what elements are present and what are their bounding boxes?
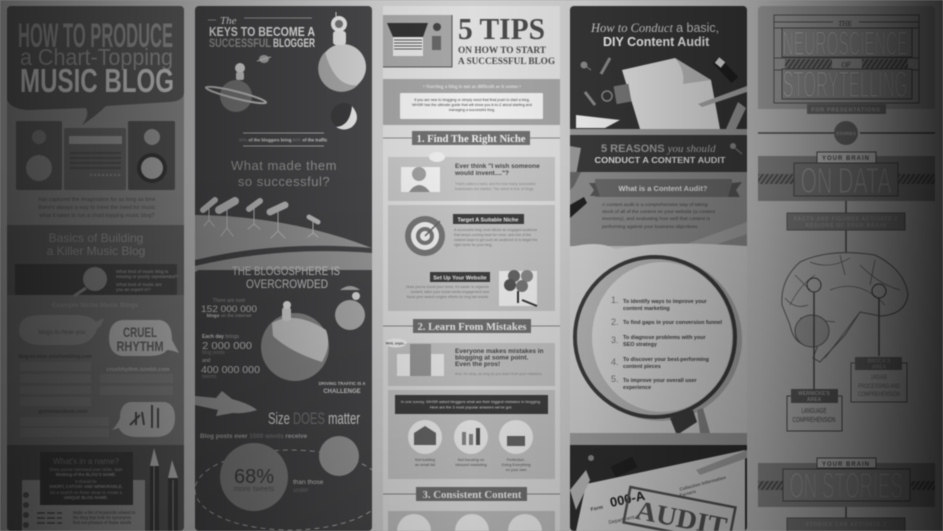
illustration: rocket [195,391,257,416]
blog url and description: greenlandbob.com [38,409,88,415]
card: survey [388,390,555,479]
card: consistent content [388,511,555,531]
callout: broca's area: AREA [872,364,886,370]
illustration: ringed planet with astronaut [205,63,267,112]
callout: broca's area: BROCA'S [868,358,891,364]
header background and title: DIY Content Audit [603,35,710,49]
label: stories can activate: STORIES CAN ACTIVATE 7 [805,522,887,528]
heading: 2. learn from mistakes [383,319,560,333]
blog statistics: 2 000 000 [202,341,252,352]
blog statistics: blogs on the internet [207,313,252,319]
than those under [292,479,324,492]
speech bubble: cruel rhythm [109,320,179,356]
list of five reasons: content marketing [623,306,670,312]
label: example niche music blogs: Example Niche Music Blogs [52,302,139,309]
planet: small [319,436,359,476]
speech bubble: cruel rhythm: CRUEL [123,324,157,340]
stereo speakers and radio [16,121,175,190]
list of five reasons: 3. [611,335,619,345]
heading: 5 reasons [570,135,747,172]
heading: 1. find the right niche [383,131,560,145]
small planet [257,55,271,63]
card: survey: In one survey, WHSR asked bloggers what are their biggest mistakes in blogging. [401,399,541,404]
what's in a name box [40,452,133,505]
open book [570,244,747,433]
blog description lists [19,354,170,372]
title: BLOGGER [273,36,315,50]
section header: your brain on stories: YOUR BRAIN [822,462,870,468]
blog statistics: blog posts [202,350,225,356]
card: ever think: businesses are started. The same is true of blogs. [455,187,534,191]
title frame [774,15,919,103]
card: everyone makes mistakes: Even the pros! [455,361,500,368]
audit form illustration: Department of [608,513,641,526]
blog statistics [201,298,260,380]
title: KEYS TO BECOME A [209,24,315,39]
title: 5 tips: 5 TIPS [458,11,545,46]
blog statistics: There are over [213,298,246,304]
card: everyone makes mistakes: Everyone makes mistakes in [455,348,544,355]
blog url and description [39,410,88,414]
blog posts note: Blog posts over 1500 words receive [200,433,308,440]
callout: broca's area: COMPREHENSION [858,391,900,398]
card: target and website: right niche for your blog. [454,243,493,247]
callout: wernicke's area [787,389,842,431]
illustration: crowded planet [261,286,365,381]
than those under: under [293,488,308,494]
what's in a name box: UNIQUE BLOG NAME. [64,495,108,500]
section header: your brain on stories [758,458,935,507]
card: everyone makes mistakes: And, it's okay, as long as you learn from your mistakes. [455,372,543,376]
card: target and website: A successful blog must attract an engaged audience [454,228,537,232]
card: everyone makes mistakes: blogging at some point. [455,354,528,362]
what's in a name box: Once you've narrowed your niche, start [50,467,123,472]
definition text: inventory), and evaluating how well that content is [602,216,710,222]
dark question box with magnifier: missing or poorly represented? [116,274,178,279]
magnifying glass [575,257,742,433]
definition text: stock of all of the content on your website (a content [602,209,715,215]
heading: 3. consistent content: 3. Consistent Content [422,490,522,501]
card: ever think: That's called a need, and it's how many successful [455,182,536,186]
what's in a name box: It should be [75,479,97,484]
panel: neuroscience of storytelling [758,6,935,531]
speech bubble: first blog [19,315,104,345]
intro text [38,197,156,219]
card: survey: inbound marketing [455,463,487,467]
pencils [150,448,178,531]
card: target and website: focus your search engine efforts for long tail results. [407,295,489,299]
heading: blogosphere overcrowded: OVERCROWDED [246,277,328,291]
card: target and website [388,205,555,311]
title: 5 tips: ON HOW TO START [458,45,546,55]
heading: 1. find the right niche: 1. Find The Right Niche [416,134,526,145]
big planet: 68% more tweets [220,443,288,511]
card: ever think: Ever think "I wish someone [455,163,540,170]
speech bubble: first blog: blogs-to-hear-you [38,330,86,336]
orbit path [195,450,385,530]
list of five reasons: 4. [611,357,619,367]
panel: keys to become a successful blogger [195,6,385,531]
speech bubble: cruel rhythm: RHYTHM [116,338,164,354]
callout: wernicke's area: LANGUAGE [802,408,827,415]
blog statistics: Each day brings [202,334,239,340]
pencil [678,222,747,252]
ribbon: what is a content audit [589,179,742,197]
list of five reasons [611,295,723,391]
card: target and website: Target A Suitable Niche [458,218,518,224]
panel: music blog infographic [7,6,184,531]
callout: driving traffic [319,381,365,395]
heading: 2. learn from mistakes: 2. Learn From Mistakes [418,322,527,333]
what's in a name box: thinking of the BLOG'S NAME. [56,472,116,477]
callout: broca's area [851,357,907,402]
keyword list: find out phrases of those words [73,520,131,525]
heading: basics of building: a Killer Music Blog [47,244,145,258]
title [208,15,315,50]
label: stories can activate [787,507,905,531]
seal divider [758,121,935,145]
intro text: has captured the imagination for as long as time [38,197,156,203]
title speech bubble: a Chart-Topping [20,44,173,70]
list of five reasons: To diagnose problems with your [623,335,706,341]
heading: 3. consistent content [383,487,560,501]
usb and pen props [570,146,747,246]
heading: size does matter: Size DOES matter [268,409,360,428]
hill with telescopes [195,200,372,272]
label: facts and figures: REGIONS OF YOUR BRAIN [805,223,887,229]
header laptop illustration [383,15,452,67]
list of five reasons: 1. [611,295,619,305]
intro band: If you are new to blogging or simply need that final push to start a blog, [414,98,530,102]
keyword list: Make a list of keywords related to [73,510,136,515]
title speech bubble [7,6,184,125]
heading: 5 reasons: CONDUCT A CONTENT AUDIT [594,155,726,165]
ribbon: what is a content audit: What is a Content Audit? [619,184,708,193]
label: facts and figures [787,201,905,252]
statistic: 20% of bloggers [239,133,328,146]
illustration: paper, clip and pencil [576,58,747,129]
for presentations ribbon [807,104,886,114]
title text [782,20,908,105]
card: target and website: Set Up Your Website [433,276,487,282]
callout: broca's area: PROCESSING AND [858,383,900,390]
illustration: astronaut on moon [318,12,366,92]
audit form illustration: Earners [679,489,697,498]
card: target and website: easiest ways to get such an audience is to target the [454,238,538,242]
definition text: performing against your business objectives. [602,224,699,230]
definition text [602,202,715,230]
title speech bubble: MUSIC BLOG [20,62,174,99]
card: target and website: that keeps coming back for more, and one of the [454,233,531,237]
illustration: brain [782,253,908,389]
title text: OF [841,61,851,69]
big planet: 68% more tweets: 68% [234,466,274,488]
section header: your brain on data [758,152,935,201]
what's in a name box: SHORT, CATCHY AND MEMORABLE. [49,484,123,489]
intro text: there's always a way to meet the need for music [38,205,156,211]
title: The [220,15,237,27]
list of five reasons: To identify ways to improve your [623,299,708,305]
crescent moon [331,103,357,130]
blog statistics: 152 000 000 [201,304,257,315]
list of five reasons: To discover your best-performing [623,357,709,363]
intro band: WHSR has the ultimate guide that will show you A-to-Z about starting and [412,103,532,107]
heading: blogosphere overcrowded [232,266,340,289]
keyword list [37,510,136,525]
audit form illustration: 000-A [609,488,647,510]
dark question box with magnifier: you an expert in? [116,287,151,292]
card: survey: Not building [415,458,435,462]
callout: driving traffic: CHALLENGE [323,389,361,395]
definition text: A content audit is a comprehensive way of taking [602,202,708,208]
list of five reasons: To improve your overall user [623,378,697,384]
intro band: • Starting a blog is not as difficult as it seems • [423,85,521,90]
card: survey: an email list [415,463,436,467]
for presentations ribbon: FOR PRESENTATIONS [811,108,881,114]
title: SUCCESSFUL [209,36,271,50]
audit form illustration [570,445,747,531]
what's in a name box: What's in a name? [53,457,120,466]
what's in a name box: Do a search on these ideas to create a [50,490,123,495]
section header: your brain on data: YOUR BRAIN [822,156,870,162]
title speech bubble: HOW TO PRODUCE [18,17,173,55]
callout: broca's area: LANGUAGE [871,374,887,381]
heading: blogosphere overcrowded: THE BLOGOSPHERE IS [232,264,340,278]
list of five reasons: SEO strategy [623,342,657,348]
list of five reasons: 2. [611,317,619,327]
big planet: 68% more tweets: more tweets [234,484,275,493]
card: survey: Perfection. [507,458,525,462]
dark question box with magnifier [15,264,178,296]
card: survey: Not focusing on [458,458,484,462]
list of five reasons: To find gaps in your conversion funnel [623,320,723,326]
seal divider: STORIES [836,131,856,136]
blog description lists: cruelrhythm.tumblr.com [107,367,170,373]
than those under: than those [293,479,324,486]
heading: what made them so successful [230,160,336,186]
card: ever think: would invent...."? [454,170,509,177]
dark question box with magnifier: What kind of music are [116,282,162,287]
dark question box with magnifier: What kind of music blog is [116,269,169,274]
list of five reasons: experience [623,385,651,391]
heading: 5 reasons: 5 REASONS you should [601,143,716,155]
panel: 5 tips on how to start a successful blog [383,6,560,531]
list of five reasons: content pieces [623,364,661,370]
title: 5 tips: A SUCCESSFUL BLOG [458,56,555,66]
heading: what made them so successful: so successful? [238,174,330,189]
keyword list: the blog that look for synonyms [73,515,131,520]
heading: basics of building: Basics of Building [49,231,143,245]
callout: wernicke's area: WERNICKE'S [798,391,831,397]
heading: basics of building [47,231,145,258]
blog statistics: 400 000 000 [201,365,260,376]
card: ever think [388,152,555,201]
card: target and website: content, tailor your social media engagement and [410,290,489,294]
intro band [383,79,560,125]
blog statistics: and [202,358,211,364]
card: everyone makes mistakes: Well, oops... [386,342,406,346]
card: everyone makes mistakes [385,338,555,386]
heading: what made them so successful: What made them [231,158,337,173]
callout: wernicke's area: COMPREHENSION [792,417,836,424]
intro text: what it takes to run a chart-topping music blog? [38,213,155,219]
list of five reasons: 5. [611,374,619,384]
statistic: 20% of bloggers: 20% of the bloggers bring 80% of the traffic [239,138,328,142]
title: 5 tips [458,18,556,65]
callout: wernicke's area: AREA [807,397,821,403]
panel: how to conduct a basic DIY content audit [570,6,747,531]
card: target and website: Once you've found your niche, it's easier to organize [406,285,489,289]
header background and title: How to Conduct a basic, [590,21,719,35]
card: survey: Doing Everything [502,463,530,467]
speech bubble: third blog [112,402,175,437]
intro band: managing a successful blog. [449,108,495,112]
label: facts and figures: FACTS AND FIGURES ACTIVATE 2 [794,216,898,222]
blog statistics: tweets [202,374,217,380]
audit form illustration: Form [590,504,604,513]
title text: THE [838,20,852,28]
header background and title [570,6,747,129]
audit form illustration: Collection Information [679,475,727,492]
card: survey: on your own [506,468,526,472]
card: survey: Here are the 3 most popular answers we've got. [430,404,512,410]
notebook [7,445,184,531]
blog description lists: blog-to-hear-yournewblog.com [18,354,92,360]
callout: driving traffic: DRIVING TRAFFIC IS A [319,381,365,386]
